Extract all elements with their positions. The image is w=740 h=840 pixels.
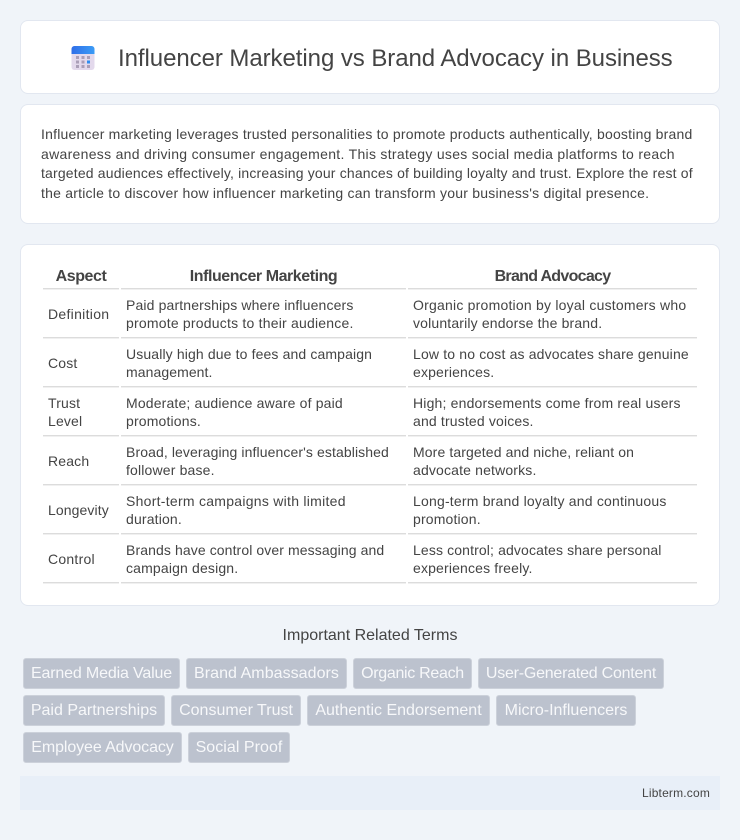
footer credit: Libterm.com [642,786,710,800]
row: Reach: advocate networks. [413,462,536,478]
intro text: Influencer marketing leverages trusted personalities to promote products authentically, boosting brand [41,126,693,142]
row: Reach [48,444,634,478]
related terms heading: Important Related Terms [283,627,457,644]
tag: Organic Reach [361,665,464,682]
row: Reach: More targeted and niche, reliant on [413,444,634,460]
header panel [20,20,720,94]
row: Definition: promote products to their audience. [126,315,354,331]
row: Control: Control [48,551,95,567]
row: Control: Brands have control over messaging and [126,542,384,558]
tag [23,658,180,689]
row: Definition [48,297,686,331]
intro text [41,126,693,201]
column header: Influencer Marketing: Influencer Marketing [190,268,337,285]
tag [171,695,301,726]
tag: Micro-Influencers [505,702,627,719]
row: Definition: voluntarily endorse the brand. [413,315,602,331]
comparison table panel [20,244,720,606]
tag [478,658,664,689]
tag [188,732,290,763]
row: Trust Level: and trusted voices. [413,413,534,429]
row: Trust Level: promotions. [126,413,201,429]
tag: User-Generated Content [486,665,656,682]
tag [353,658,472,689]
row: Longevity [48,493,667,527]
row: Reach: Reach [48,453,89,469]
row: Longevity: Longevity [48,502,109,518]
row: Trust Level: Moderate; audience aware of paid [126,395,343,411]
row: Control: Less control; advocates share personal [413,542,662,558]
title: Influencer Marketing vs Brand Advocacy in Business [118,45,673,72]
row: Longevity: duration. [126,511,182,527]
row: Longevity: Short-term campaigns with limited [126,493,346,509]
tag: Employee Advocacy [31,739,174,756]
row: Cost: Cost [48,355,77,371]
row: Control: experiences freely. [413,560,533,576]
row: Longevity: promotion. [413,511,481,527]
tag: Earned Media Value [31,665,172,682]
intro text: the article to discover how influencer marketing can transform your business's digital presence. [41,185,649,201]
intro text: targeted audiences effectively, increasing your chances of building loyalty and trust. Explore the rest of [41,165,693,181]
row: Definition: Definition [48,306,109,322]
footer bar [20,776,720,810]
tag [186,658,347,689]
intro text: awareness and driving consumer engagement. This strategy uses social media platforms to reach [41,146,675,162]
row: Definition: Paid partnerships where influencers [126,297,353,313]
intro panel [20,104,720,224]
tag: Consumer Trust [179,702,293,719]
tag [23,695,165,726]
row: Cost [48,346,689,380]
row: Trust Level: Level [48,413,82,429]
tag: Brand Ambassadors [194,665,339,682]
icon: calendar [72,46,94,70]
row: Trust Level: Trust [48,395,80,411]
row: Trust Level: High; endorsements come from real users [413,395,681,411]
row: Trust Level [48,395,681,429]
tag: Social Proof [196,739,282,756]
row: Reach: follower base. [126,462,215,478]
row: Definition: Organic promotion by loyal customers who [413,297,686,313]
tag: Paid Partnerships [31,702,157,719]
row: Cost: Usually high due to fees and campaign [126,346,372,362]
row: Reach: Broad, leveraging influencer's established [126,444,389,460]
tag: Authentic Endorsement [315,702,482,719]
tag [307,695,490,726]
row: Control [48,542,662,576]
column header: Aspect: Aspect [56,268,106,285]
row: Cost: Low to no cost as advocates share genuine [413,346,689,362]
tag [496,695,636,726]
related term tags [23,658,664,763]
row: Cost: experiences. [413,364,494,380]
row: Cost: management. [126,364,212,380]
row: Control: campaign design. [126,560,238,576]
row: Longevity: Long-term brand loyalty and continuous [413,493,667,509]
tag [23,732,182,763]
column header: Brand Advocacy: Brand Advocacy [495,268,610,285]
